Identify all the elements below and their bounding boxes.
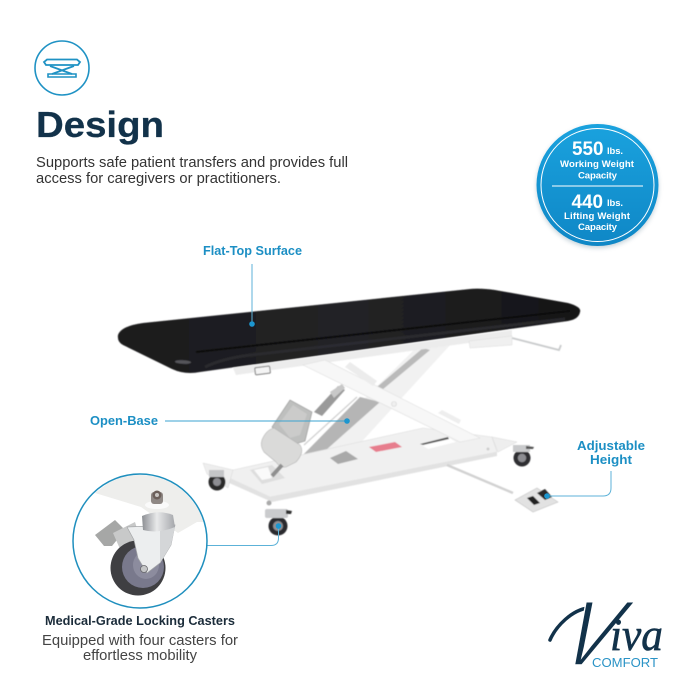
badge: weight capacity: lbs. <box>607 198 623 209</box>
under-deck rail <box>233 330 512 375</box>
text block: intro: access for caregivers or practitioners. <box>36 171 281 187</box>
badge: weight capacity: 440 <box>572 191 603 213</box>
text block: casters caption: effortless mobility <box>83 648 198 664</box>
inset: caster close-up <box>70 470 210 610</box>
callout: flat-top surface: Flat-Top Surface <box>203 244 302 258</box>
callout: adjustable height <box>544 439 645 499</box>
product: treatment table <box>118 289 580 536</box>
table top upholstery <box>118 289 580 373</box>
bolt and washer <box>145 501 169 509</box>
badge: weight capacity: Working Weight <box>560 159 635 170</box>
wheel <box>110 540 166 596</box>
callout: flat-top surface <box>203 244 302 327</box>
brake lever <box>95 520 125 546</box>
badge: weight capacity: Capacity <box>578 170 618 182</box>
callout: open-base: Open-Base <box>90 414 158 428</box>
text block: casters caption <box>42 614 238 664</box>
badge: weight capacity <box>536 124 658 248</box>
callout: adjustable height: Height <box>590 453 633 467</box>
callout: adjustable height: Adjustable <box>577 439 645 453</box>
logo: Viva Comfort: iva <box>610 609 663 660</box>
text block: intro: Supports safe patient transfers and provides full <box>36 155 348 171</box>
foot pedal and cord <box>447 465 558 512</box>
logo: Viva Comfort: COMFORT <box>592 655 658 670</box>
badge: weight capacity: lbs. <box>607 146 623 157</box>
swivel housing <box>142 512 175 531</box>
front scissor arm <box>303 360 480 442</box>
callout: open-base <box>90 414 350 428</box>
logo: Viva Comfort: V <box>543 583 645 686</box>
base frame <box>203 428 517 502</box>
rear scissor arm <box>300 343 452 462</box>
heading: Design: Design <box>36 104 164 145</box>
handle wire <box>512 338 561 350</box>
callout: caster leader line <box>207 523 281 546</box>
badge: weight capacity: Lifting Weight <box>564 211 631 222</box>
text block: casters caption: Medical-Grade Locking Casters <box>45 614 235 628</box>
icon: scissor-lift table <box>35 41 89 95</box>
text block: casters caption: Equipped with four casters for <box>42 633 238 649</box>
badge: weight capacity: Capacity <box>578 222 618 233</box>
lift motor and actuator <box>261 384 357 476</box>
casters <box>208 445 534 536</box>
badge: weight capacity: 550 <box>572 138 604 160</box>
fork <box>127 525 175 573</box>
text block: intro <box>36 155 348 187</box>
